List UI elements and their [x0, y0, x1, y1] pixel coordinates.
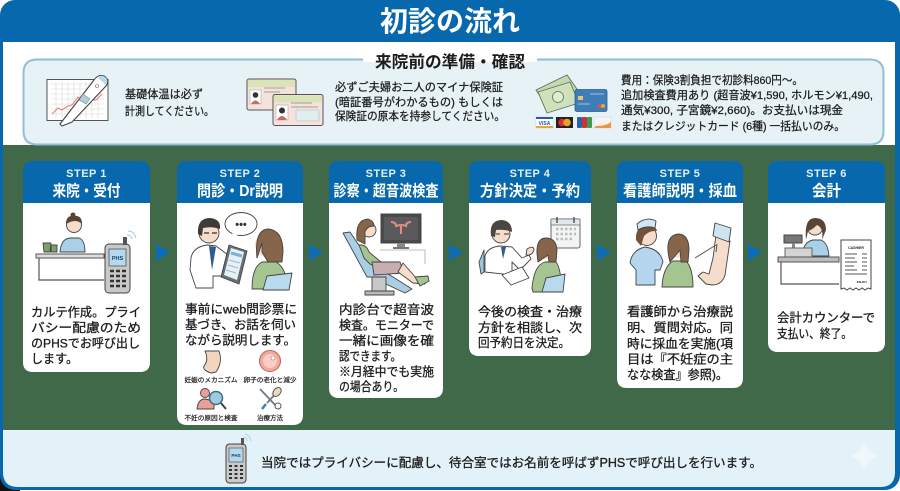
illustration: reception with PHS — [36, 212, 136, 293]
text: insurance card reminder: 必ずご夫婦お二人のマイナ保険証 — [335, 80, 503, 94]
title: 初診の流れ — [380, 6, 520, 37]
text: fees: 通気¥300, 子宮鏡¥2,660)。お支払いは現金 — [621, 103, 843, 117]
card: step 4 — [469, 161, 591, 356]
card: step 2: 問診・Dr説明 — [197, 181, 283, 200]
illustration: doctor explaining to patient: ••• — [235, 219, 247, 231]
illustration: examination chair and monitor — [343, 214, 429, 295]
step 1 text — [31, 306, 141, 366]
arrow — [309, 244, 323, 261]
callout: privacy note — [226, 434, 762, 483]
card: step 3: 診察・超音波検査 — [334, 181, 439, 200]
arrow — [597, 244, 611, 261]
step 1 text: カルテ作成。プライ — [31, 306, 141, 320]
step 5 text: なな検査』参照)。 — [627, 368, 728, 382]
arrow — [748, 244, 762, 261]
step 4 text: 回予約日を決定。 — [478, 335, 570, 350]
decorative sparkle — [851, 441, 878, 471]
step 6 text: 支払い、終了。 — [777, 326, 852, 341]
illustration: cashier counter and receipt: CASHIER — [848, 246, 864, 250]
panel: pre-visit preparation — [24, 50, 884, 144]
step 4 text: 今後の検査・治療 — [478, 304, 582, 319]
step 6 text — [777, 310, 875, 341]
step 3 text — [339, 302, 434, 394]
panel heading: 来院前の準備・確認 — [375, 52, 526, 72]
icon: PHS phone: PHS — [231, 453, 241, 458]
step 2 text: 基づき、お話を伺い — [185, 318, 296, 332]
topic: egg aging: 卵子の老化と減少 — [244, 375, 297, 384]
card: step 1: STEP 1 — [66, 168, 107, 180]
callout: privacy note: 当院ではプライバシーに配慮し、待合室ではお名前を呼ばずPHSで呼び出しを行います。 — [261, 455, 762, 470]
illustration: nurse drawing blood — [630, 219, 731, 287]
step 3 text: 内診台で超音波 — [339, 302, 434, 317]
step 3 text: 認できます。 — [339, 350, 401, 364]
text: basal temperature: 計測してください。 — [125, 104, 214, 118]
card: step 5: STEP 5 — [660, 168, 700, 180]
arrow — [449, 244, 463, 261]
card: step 1 — [23, 161, 150, 372]
icon: cash and credit card — [536, 75, 611, 128]
illustration: reception with PHS: PHS — [112, 256, 123, 262]
topic: causes and tests: 不妊の原因と検査 — [184, 413, 238, 422]
icon: insurance cards — [247, 79, 323, 126]
text: basal temperature — [125, 87, 214, 118]
icon grid: explanation topics — [184, 350, 297, 422]
step 6 text: 会計カウンターで — [777, 310, 875, 325]
step 1 text: します。 — [31, 352, 78, 366]
card: step 2: STEP 2 — [220, 168, 260, 180]
step 4 text — [478, 304, 583, 350]
icon: PHS phone — [226, 434, 251, 483]
text: insurance card reminder — [335, 80, 505, 123]
topic: mechanism of pregnancy: 妊娠のメカニズム — [184, 375, 238, 384]
step 5 text: 時に採血を実施(項 — [627, 336, 734, 351]
icon: thermometer and chart — [47, 76, 108, 126]
text: insurance card reminder: 保険証の原本を持参してください。 — [335, 109, 505, 123]
step 5 text: 明、質問対応。同 — [627, 320, 733, 335]
step 3 text: ※月経中でも実施 — [339, 364, 434, 379]
card: step 6 — [768, 161, 885, 352]
illustration: consultation with calendar — [479, 217, 580, 292]
illustration: cashier counter and receipt: ENJOY — [857, 280, 867, 284]
step 2 text: 事前にweb問診票に — [185, 302, 297, 316]
step 1 text: バシー配慮のため — [31, 321, 141, 335]
illustration: doctor explaining to patient — [190, 212, 292, 290]
text: fees: 費用：保険3割負担で初診料860円〜。 — [621, 73, 803, 87]
step 5 text — [627, 304, 734, 382]
card: step 6: 会計 — [812, 182, 841, 200]
text: fees — [621, 73, 873, 133]
card: step 1: 来院・受付 — [52, 181, 120, 200]
step 5 text: 看護師から治療説 — [627, 304, 734, 319]
arrow — [156, 244, 170, 261]
step 2 text: ながら説明します。 — [185, 332, 296, 348]
text: fees: またはクレジットカード (6種) 一括払いのみ。 — [621, 119, 845, 133]
step 2 text — [185, 302, 297, 348]
card: step 2 — [177, 161, 303, 425]
illustration: cashier counter and receipt — [778, 218, 871, 290]
step 3 text: 検査。モニターで — [339, 318, 434, 332]
topic: treatment methods: 治療方法 — [257, 413, 284, 422]
card: step 3 — [329, 161, 443, 398]
card: step 3: STEP 3 — [366, 168, 406, 180]
step 3 text: 一緒に画像を確 — [339, 333, 434, 348]
text: insurance card reminder: (暗証番号がわかるもの) もしくは — [335, 95, 503, 109]
icon: card brand logos: VISA — [539, 121, 551, 127]
step 4 text: 方針を相談し、次 — [478, 320, 583, 335]
step 3 text: の場合あり。 — [339, 380, 404, 394]
card: step 4: 方針決定・予約 — [480, 181, 580, 200]
text: basal temperature: 基礎体温は必ず — [125, 87, 203, 101]
card: step 4: STEP 4 — [510, 168, 551, 180]
card: step 5 — [617, 161, 743, 388]
card: step 5: 看護師説明・採血 — [623, 181, 737, 200]
text: fees: 追加検査費用あり (超音波¥1,590, ホルモン¥1,490, — [621, 88, 873, 102]
card: step 6: STEP 6 — [806, 168, 847, 180]
step 5 text: 目は『不妊症の主 — [627, 352, 733, 366]
step 1 text: のPHSでお呼び出し — [31, 336, 140, 350]
